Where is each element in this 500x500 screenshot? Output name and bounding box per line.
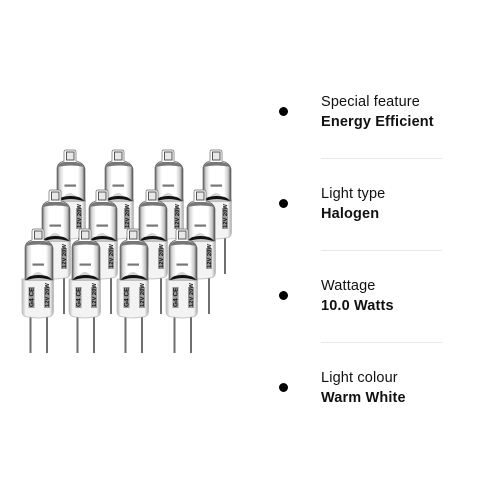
bulb middle 2 bbox=[86, 190, 118, 314]
bulb back 3 bbox=[152, 150, 184, 274]
bulb back 4: 12V 20W bbox=[223, 204, 229, 228]
text: special feature: Energy Efficient bbox=[321, 114, 434, 130]
bulb back 1 bbox=[54, 150, 86, 274]
bulb front 1: G4 CE bbox=[28, 287, 36, 307]
front row bulbs bbox=[22, 229, 198, 353]
illustration: twelve G4 halogen bulbs bbox=[22, 150, 232, 353]
text: light type bbox=[321, 186, 385, 222]
bullet: light colour bbox=[279, 383, 288, 392]
bulb middle 4: 12V 20W bbox=[207, 244, 213, 268]
bulb middle 3: 12V 20W bbox=[159, 244, 165, 268]
bulb middle 3 bbox=[136, 190, 168, 314]
bulb middle 2: 12V 20W bbox=[109, 244, 115, 268]
text: wattage: 10.0 Watts bbox=[321, 298, 394, 314]
text: light colour: Light colour bbox=[321, 370, 398, 386]
text: wattage bbox=[321, 278, 394, 314]
bulb back 4 bbox=[200, 150, 232, 274]
bulb back 1: 12V 20W bbox=[77, 204, 83, 228]
text: light colour bbox=[321, 370, 406, 406]
bulb front 4 bbox=[166, 229, 198, 353]
text: special feature: Special feature bbox=[321, 94, 420, 110]
bulb front 1: 12V 20W bbox=[45, 283, 51, 307]
bulb middle 1 bbox=[39, 190, 70, 314]
text: wattage: Wattage bbox=[321, 278, 376, 294]
bullet: wattage bbox=[279, 291, 288, 300]
bulb front 4: G4 CE bbox=[172, 287, 180, 307]
bulb middle 1: 12V 20W bbox=[62, 244, 68, 268]
back row bulbs bbox=[54, 150, 232, 274]
text: special feature bbox=[321, 94, 434, 130]
bulb front 1 bbox=[22, 229, 54, 353]
text: light type: Light type bbox=[321, 186, 385, 202]
bulb front 2: G4 CE bbox=[76, 287, 82, 307]
text: light type: Halogen bbox=[321, 206, 379, 222]
bulb middle 4 bbox=[184, 190, 216, 314]
bulb back 2: 12V 20W bbox=[125, 204, 131, 228]
bulb front 2: 12V 20W bbox=[92, 283, 98, 307]
bulb back 2 bbox=[102, 150, 134, 274]
bulb back 3: 12V 20W bbox=[175, 204, 181, 228]
bulb front 3: G4 CE bbox=[124, 287, 130, 307]
bulb front 3 bbox=[117, 229, 148, 353]
text: light colour: Warm White bbox=[321, 390, 406, 406]
bulb front 4: 12V 20W bbox=[189, 283, 195, 307]
bulb front 3: 12V 20W bbox=[140, 283, 146, 307]
middle row bulbs bbox=[39, 190, 216, 314]
bulb front 2 bbox=[69, 229, 100, 353]
bullet: special feature bbox=[279, 107, 288, 116]
bullet: light type bbox=[279, 199, 288, 208]
